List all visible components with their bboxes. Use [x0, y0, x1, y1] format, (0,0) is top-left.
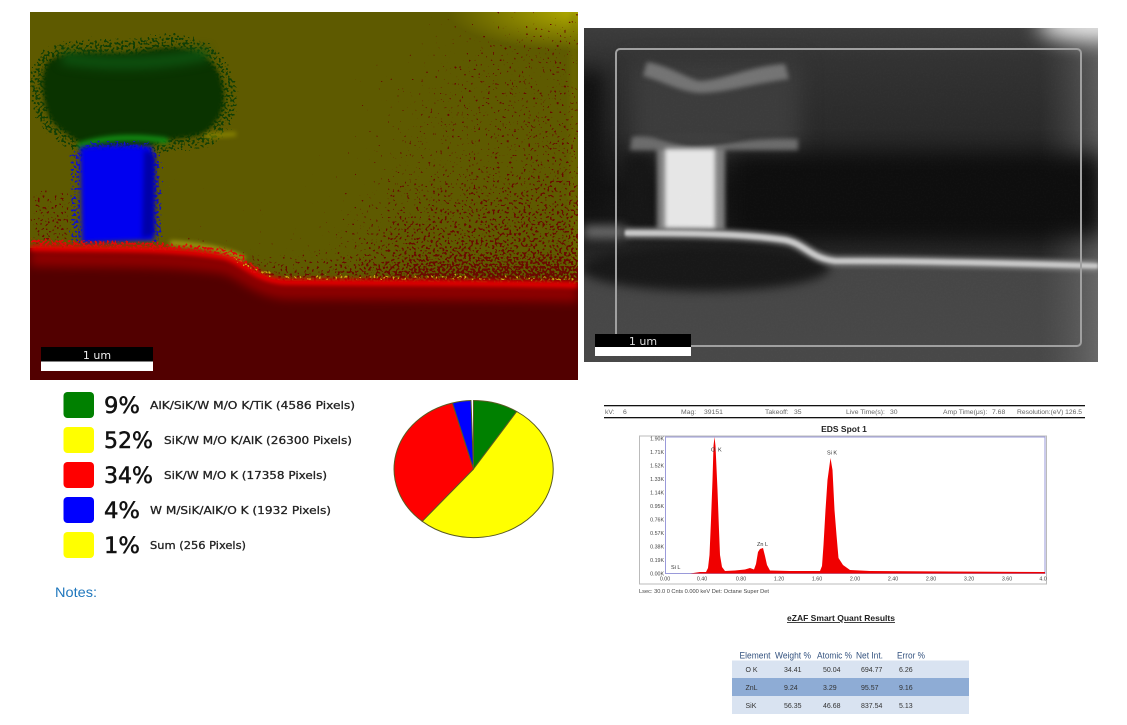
- y axis labels: 0.38K: [650, 544, 664, 550]
- table header: Error %: [897, 650, 925, 660]
- peak labels: Si K: [827, 450, 837, 456]
- panel: SEM micrograph: [584, 28, 1098, 362]
- table header: Element: [740, 650, 771, 660]
- pie chart: [394, 400, 553, 538]
- legend item: sum: [64, 532, 246, 559]
- bright pillar: [657, 148, 725, 230]
- table header: [740, 650, 925, 660]
- x axis labels: 1.60: [812, 576, 822, 582]
- legend item: red: [64, 462, 327, 489]
- x axis labels: 0.80: [736, 576, 746, 582]
- y axis labels: 0.19K: [650, 558, 664, 564]
- bright ridge line: [584, 226, 625, 238]
- table header: Net Int.: [856, 650, 883, 660]
- green phase: [41, 45, 236, 146]
- table header: Weight %: [775, 650, 811, 660]
- notes label: Notes:: [55, 584, 97, 600]
- peak labels: [671, 448, 837, 571]
- legend item: green: 9%: [104, 394, 140, 419]
- speckle noise: [30, 12, 578, 292]
- y axis labels: 0.76K: [650, 518, 664, 524]
- table rows: O K: [746, 667, 758, 674]
- y axis labels: 1.33K: [650, 477, 664, 483]
- EDS acquisition header: 7.68: [992, 409, 1005, 416]
- table rows: 95.57: [861, 685, 879, 692]
- lower grey band: [630, 136, 798, 150]
- scale bar: [41, 347, 153, 371]
- EDS acquisition header: Amp Time(μs):: [943, 409, 987, 416]
- table rows: 6.26: [899, 667, 913, 674]
- legend item: green: [64, 392, 355, 419]
- quant results title: eZAF Smart Quant Results: [787, 613, 895, 623]
- EDS acquisition header: Resolution:(eV) 126.5: [1017, 409, 1082, 416]
- y axis labels: 1.71K: [650, 450, 664, 456]
- legend item: yellow: SiK/W M/O K/AlK (26300 Pixels): [164, 434, 352, 447]
- scale bar: [595, 334, 691, 356]
- upper grey band: [643, 62, 789, 93]
- table rows: 34.41: [784, 667, 802, 674]
- scale bar: 1 um: [83, 349, 111, 362]
- blue phase: [76, 145, 156, 245]
- legend item: red: 34%: [104, 464, 153, 489]
- EDS acquisition header: 35: [794, 409, 802, 416]
- peak labels: Zn L: [757, 542, 768, 548]
- table rows: 56.35: [784, 703, 802, 710]
- y axis labels: 1.52K: [650, 464, 664, 470]
- quant results table: [732, 650, 969, 714]
- substrate: [30, 248, 578, 380]
- legend item: yellow: 52%: [104, 429, 153, 454]
- x axis labels: 2.00: [850, 576, 860, 582]
- y axis labels: 1.90K: [650, 436, 664, 442]
- legend item: sum: Sum (256 Pixels): [150, 539, 246, 552]
- table rows: 50.04: [823, 667, 841, 674]
- EDS spectrum chart: [639, 424, 1047, 595]
- y axis labels: 1.14K: [650, 490, 664, 496]
- EDS acquisition header: 6: [623, 409, 627, 416]
- peak labels: K: [718, 448, 722, 454]
- table rows: [746, 667, 913, 710]
- table rows: 694.77: [861, 667, 883, 674]
- y axis labels: 0.57K: [650, 531, 664, 537]
- spectrum peaks: [665, 437, 1045, 574]
- EDS acquisition header: Live Time(s):: [846, 409, 885, 416]
- scale bar: 1 um: [629, 335, 657, 348]
- legend item: blue: W M/SiK/AlK/O K (1932 Pixels): [150, 504, 331, 517]
- legend item: blue: [64, 497, 331, 524]
- legend item: green: AlK/SiK/W M/O K/TiK (4586 Pixels): [150, 399, 355, 412]
- table rows: 3.29: [823, 685, 837, 692]
- dark lens under ridge: [580, 245, 830, 291]
- x axis labels: 1.20: [774, 576, 784, 582]
- y axis labels: 0.95K: [650, 504, 664, 510]
- panel: elemental phase map: [30, 12, 578, 380]
- x axis labels: 3.60: [1002, 576, 1012, 582]
- peak labels: O: [711, 448, 716, 454]
- x axis labels: 0.00: [660, 576, 670, 582]
- table rows: ZnL: [746, 685, 758, 692]
- x axis labels: 4.0: [1039, 576, 1047, 582]
- x axis labels: 3.20: [964, 576, 974, 582]
- legend: [64, 392, 355, 559]
- EDS acquisition header: Takeoff:: [765, 409, 789, 416]
- EDS acquisition header: 30: [890, 409, 898, 416]
- EDS acquisition header: Mag:: [681, 409, 696, 416]
- x axis labels: 2.80: [926, 576, 936, 582]
- table rows: 5.13: [899, 703, 913, 710]
- table rows: SiK: [746, 703, 757, 710]
- legend item: yellow: [64, 427, 352, 454]
- chart footer: Lsec: 30.0 0 Cnts 0.000 keV Det: Octane Super Det: [639, 589, 770, 595]
- legend item: sum: 1%: [104, 534, 140, 559]
- table rows: 9.16: [899, 685, 913, 692]
- legend item: red: SiK/W M/O K (17358 Pixels): [164, 469, 327, 482]
- y axis labels: 0.00K: [650, 572, 664, 578]
- table rows: 837.54: [861, 703, 883, 710]
- chart title: EDS Spot 1: [821, 424, 867, 434]
- EDS acquisition header: kV:: [605, 409, 615, 416]
- EDS acquisition header: 39151: [704, 409, 723, 416]
- y axis labels: [650, 436, 664, 578]
- EDS acquisition header: [604, 405, 1085, 418]
- x axis labels: 2.40: [888, 576, 898, 582]
- x axis labels: 0.40: [697, 576, 707, 582]
- table rows: 46.68: [823, 703, 841, 710]
- table rows: 9.24: [784, 685, 798, 692]
- peak labels: Si L: [671, 565, 680, 571]
- table header: Atomic %: [817, 650, 852, 660]
- x axis labels: [660, 576, 1047, 582]
- legend item: blue: 4%: [104, 499, 140, 524]
